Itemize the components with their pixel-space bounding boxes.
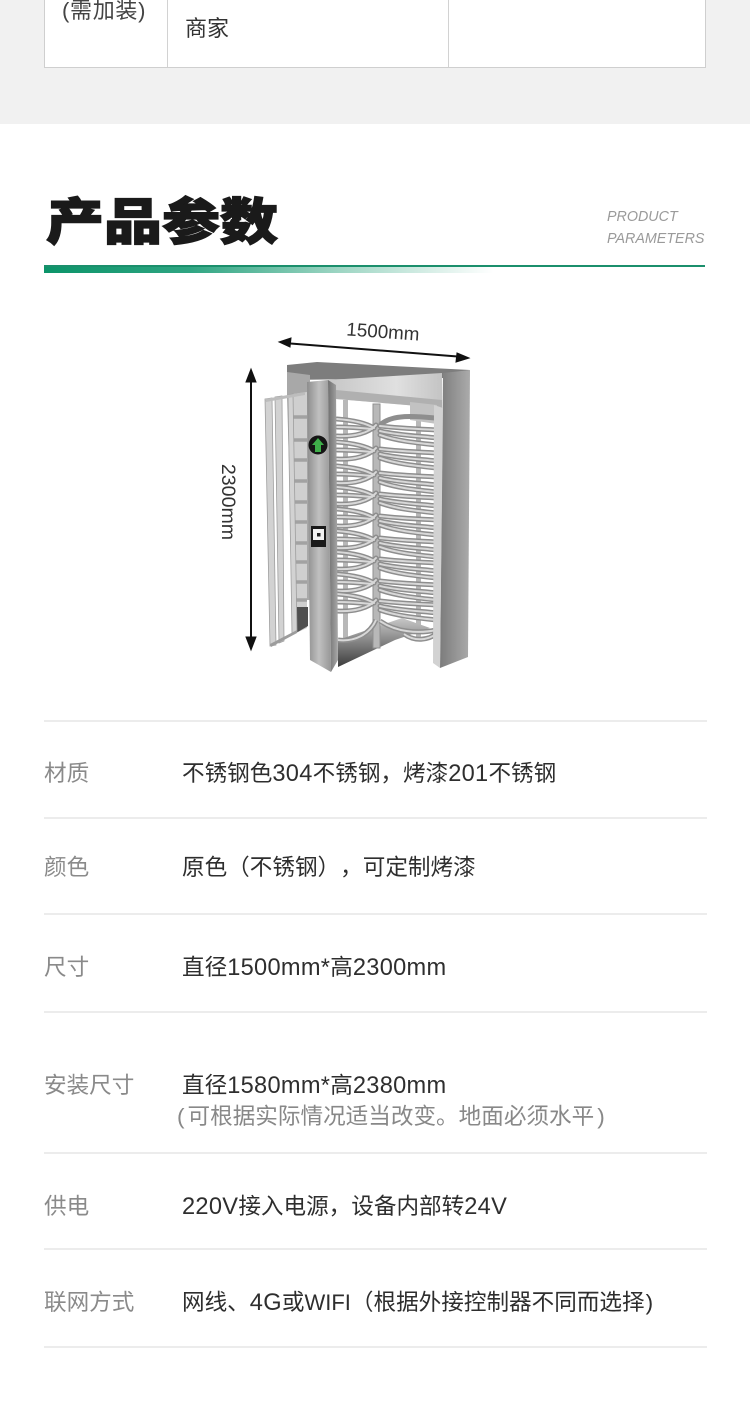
table column divider one [167,0,168,67]
note: install size: (可根据实际情况适当改变。地面必须水平) [177,1104,605,1129]
label: power: 供电 [44,1194,89,1219]
label: size: 尺寸 [44,955,89,980]
label: install size: 安装尺寸 [44,1073,134,1098]
dimension arrow: height [246,369,256,650]
row: network [44,1290,653,1316]
turnstile body [265,362,470,672]
dimension label: height: 2300mm [217,464,239,540]
back wall [287,372,310,600]
fence bars [265,394,297,646]
fence top rail [265,392,305,402]
heading underline gradient [44,265,705,273]
swing fence [265,392,308,647]
rotating arms [337,416,437,640]
value: install size: 直径1580mm*高2380mm [182,1073,446,1099]
dimension label: width: 1500mm [346,318,420,345]
rear posts [343,400,421,650]
left pillar front [307,380,331,672]
fence bottom rail [270,630,297,647]
fence dark base [295,607,308,633]
value: material: 不锈钢色304不锈钢，烤漆201不锈钢 [182,761,556,787]
fence inner panel [293,392,307,633]
floor [338,618,430,667]
table fragment [44,0,706,68]
row: size [44,955,446,981]
table cell: merchant: 商家 [185,16,229,41]
left pillar side [328,380,338,672]
underline top line [44,265,705,267]
table column divider two [448,0,449,67]
value: colour: 原色（不锈钢），可定制烤漆 [182,855,476,880]
value: power: 220V接入电源，设备内部转24V [182,1194,507,1220]
top crossbeam [328,373,442,408]
heading: product parameters: 产品参数 [46,195,278,251]
label: network: 联网方式 [44,1290,134,1315]
right pillar [440,370,470,668]
label: colour: 颜色 [44,855,89,880]
right pillar inner edge [433,405,443,668]
QR code reader [311,526,326,547]
value: network: 网线、4G或WIFI（根据外接控制器不同而选择) [182,1290,653,1316]
row: power [44,1194,507,1220]
panel: previous table section [0,0,750,124]
indicator: green arrow [308,436,328,454]
dimension arrow: width [279,338,469,362]
beam shadow [336,390,442,408]
top frame back [287,362,470,380]
row: material [44,761,556,787]
center pole [373,404,380,648]
label: material: 材质 [44,761,89,786]
product diagram: full-height turnstile with dimensions [217,318,470,672]
row: colour [44,855,476,880]
English subtitle: PRODUCT [607,209,678,225]
English subtitle [607,209,704,247]
fence rungs [293,417,307,600]
English subtitle: PARAMETERS [607,231,704,247]
value: size: 直径1500mm*高2300mm [182,955,446,981]
right upper gray block [410,402,437,424]
row: install size [44,1073,605,1129]
